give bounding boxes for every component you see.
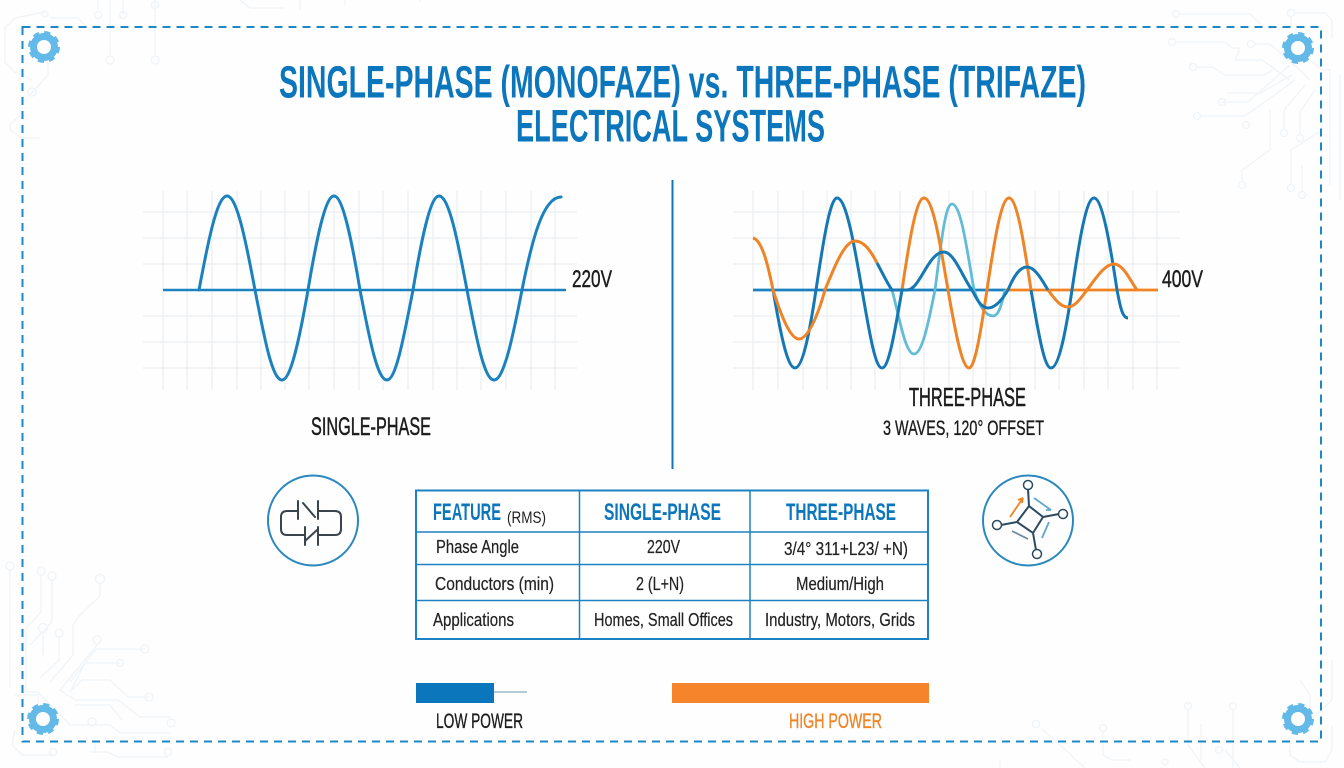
comparison table [416,490,928,639]
single-phase sine wave [199,196,561,380]
low amplitude orange wave [753,238,1137,339]
label: single-phase: SINGLE-PHASE [311,413,431,441]
icon: gear bottom left [29,705,57,733]
table body rows: Medium/High [796,574,884,594]
icon: three-phase network [983,476,1073,566]
title [279,56,1086,152]
low amplitude blue wave [877,252,1048,308]
table body rows: 2 (L+N) [636,574,684,594]
dark blue wave [773,198,1128,368]
table body rows: 220V [647,537,680,557]
label: high power: HIGH POWER [789,710,882,733]
center divider [672,180,674,469]
table body rows [433,537,915,630]
table body rows: Industry, Motors, Grids [765,610,915,630]
label: 400V: 400V [1162,266,1203,293]
label: low power: LOW POWER [436,710,523,733]
panel: single-phase waveform chart [143,191,577,390]
table body rows: Conductors (min) [435,574,554,594]
icon: single-phase circuit [268,476,358,566]
light blue wave [892,204,1005,354]
title: ELECTRICAL SYSTEMS [516,100,825,152]
icon: gear top right [1284,34,1312,62]
table header note: (RMS) [507,508,546,527]
label: three waves offset: 3 WAVES, 120° OFFSET [883,417,1044,440]
table body rows: Applications [433,610,514,630]
high power bar [672,683,929,703]
low power bar [416,683,527,703]
label: three-phase: THREE-PHASE [909,382,1026,412]
table header row [433,499,896,526]
icon: gear bottom right [1284,705,1312,733]
label: 220V: 220V [572,266,612,293]
table body rows: Homes, Small Offices [594,610,733,630]
panel: three-phase waveform chart [733,191,1180,390]
table header row: THREE-PHASE [786,499,896,526]
table body rows: Phase Angle [436,537,519,557]
icon: gear top left [30,33,58,61]
table header row: FEATURE [433,499,501,526]
table body rows: 3/4° 311+L23/ +N) [784,539,908,559]
orange wave [902,198,1031,368]
table header row: SINGLE-PHASE [604,499,721,526]
